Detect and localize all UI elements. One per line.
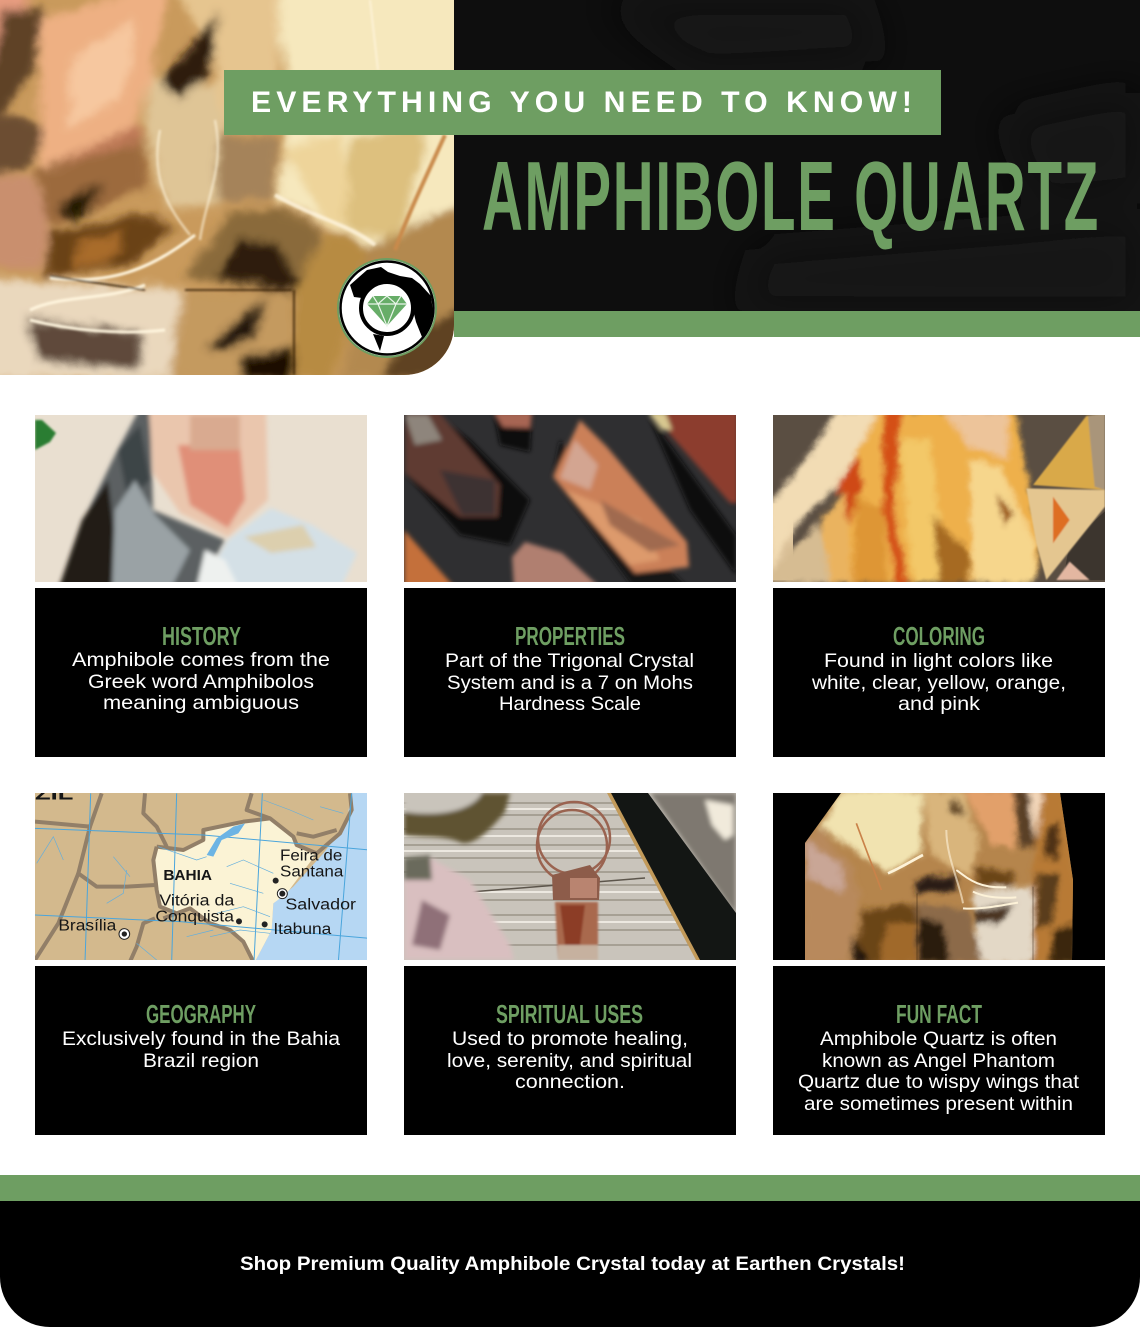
photo: history crystal — [35, 410, 367, 590]
text box: history: HISTORY — [162, 621, 241, 651]
text box: spiritual uses: Used to promote healing, — [452, 1028, 688, 1050]
text box: properties: Hardness Scale — [499, 693, 641, 715]
photo: properties crystals — [404, 410, 738, 590]
map labels — [35, 783, 356, 938]
panel: history — [35, 410, 367, 757]
footer green strip — [0, 1175, 1140, 1201]
map labels: Itabuna — [273, 921, 332, 938]
icon: Earthen Crystals globe logo — [338, 259, 436, 357]
text box: history: Greek word Amphibolos — [88, 671, 314, 693]
banner: everything you need to know: EVERYTHING YOU NEED TO KNOW! — [251, 86, 917, 119]
map labels: Salvador — [285, 896, 356, 913]
text box: coloring: COLORING — [893, 621, 985, 651]
header green strip — [454, 311, 1140, 337]
panel: dark header background — [454, 0, 1140, 311]
footer — [0, 1201, 1140, 1327]
text box: geography: Brazil region — [143, 1050, 259, 1072]
text box: coloring — [773, 588, 1105, 757]
map labels: BAHIA — [163, 868, 212, 884]
banner: everything you need to know — [224, 70, 941, 135]
text box: spiritual uses — [404, 966, 736, 1135]
text box: geography — [35, 966, 367, 1135]
panel: fun fact — [773, 790, 1105, 1135]
text box: coloring: and pink — [898, 693, 980, 715]
photo: angel phantom quartz — [773, 790, 1105, 963]
text box: properties: System and is a 7 on Mohs — [447, 672, 693, 694]
text box: properties: PROPERTIES — [515, 621, 625, 651]
text box: fun fact: are sometimes present within — [804, 1093, 1073, 1115]
map: Bahia, Brazil — [35, 783, 372, 962]
text box: coloring: Found in light colors like — [824, 650, 1053, 672]
map labels: Santana — [280, 864, 344, 881]
text box: history: Amphibole comes from the — [72, 649, 330, 671]
text box: fun fact: FUN FACT — [896, 999, 982, 1029]
text box: fun fact: Amphibole Quartz is often — [820, 1028, 1057, 1050]
text box: history: meaning ambiguous — [103, 692, 299, 714]
text box: geography: GEOGRAPHY — [146, 999, 256, 1029]
panel: coloring — [770, 410, 1106, 757]
photo: crystal pendant — [404, 793, 736, 960]
photo: amphibole quartz closeup — [0, 0, 470, 380]
text box: fun fact — [773, 966, 1105, 1135]
text box: fun fact: Quartz due to wispy wings that — [798, 1071, 1080, 1093]
map labels: Feira de — [280, 848, 342, 865]
text box: properties: Part of the Trigonal Crystal — [445, 650, 694, 672]
map labels: Vitória da — [159, 892, 235, 909]
text box: geography: Exclusively found in the Bahia — [62, 1028, 340, 1050]
panel: geography — [35, 783, 372, 1135]
map labels: Brasília — [58, 918, 117, 935]
icon: green diamond — [367, 296, 407, 326]
map labels: Conquista — [155, 909, 235, 926]
text box: coloring: white, clear, yellow, orange, — [811, 672, 1066, 694]
panel: properties — [404, 410, 738, 757]
text box: properties — [404, 588, 736, 757]
footer: Shop Premium Quality Amphibole Crystal today at Earthen Crystals! — [240, 1253, 905, 1275]
map labels: ZIL — [35, 783, 73, 803]
panel: spiritual uses — [404, 793, 736, 1135]
text box: spiritual uses: SPIRITUAL USES — [496, 999, 643, 1029]
text box: spiritual uses: connection. — [515, 1071, 625, 1093]
text box: spiritual uses: love, serenity, and spiritual — [447, 1050, 692, 1072]
photo: coloring crystal — [770, 410, 1106, 583]
text box: fun fact: known as Angel Phantom — [822, 1050, 1055, 1072]
text box: history — [35, 588, 367, 757]
